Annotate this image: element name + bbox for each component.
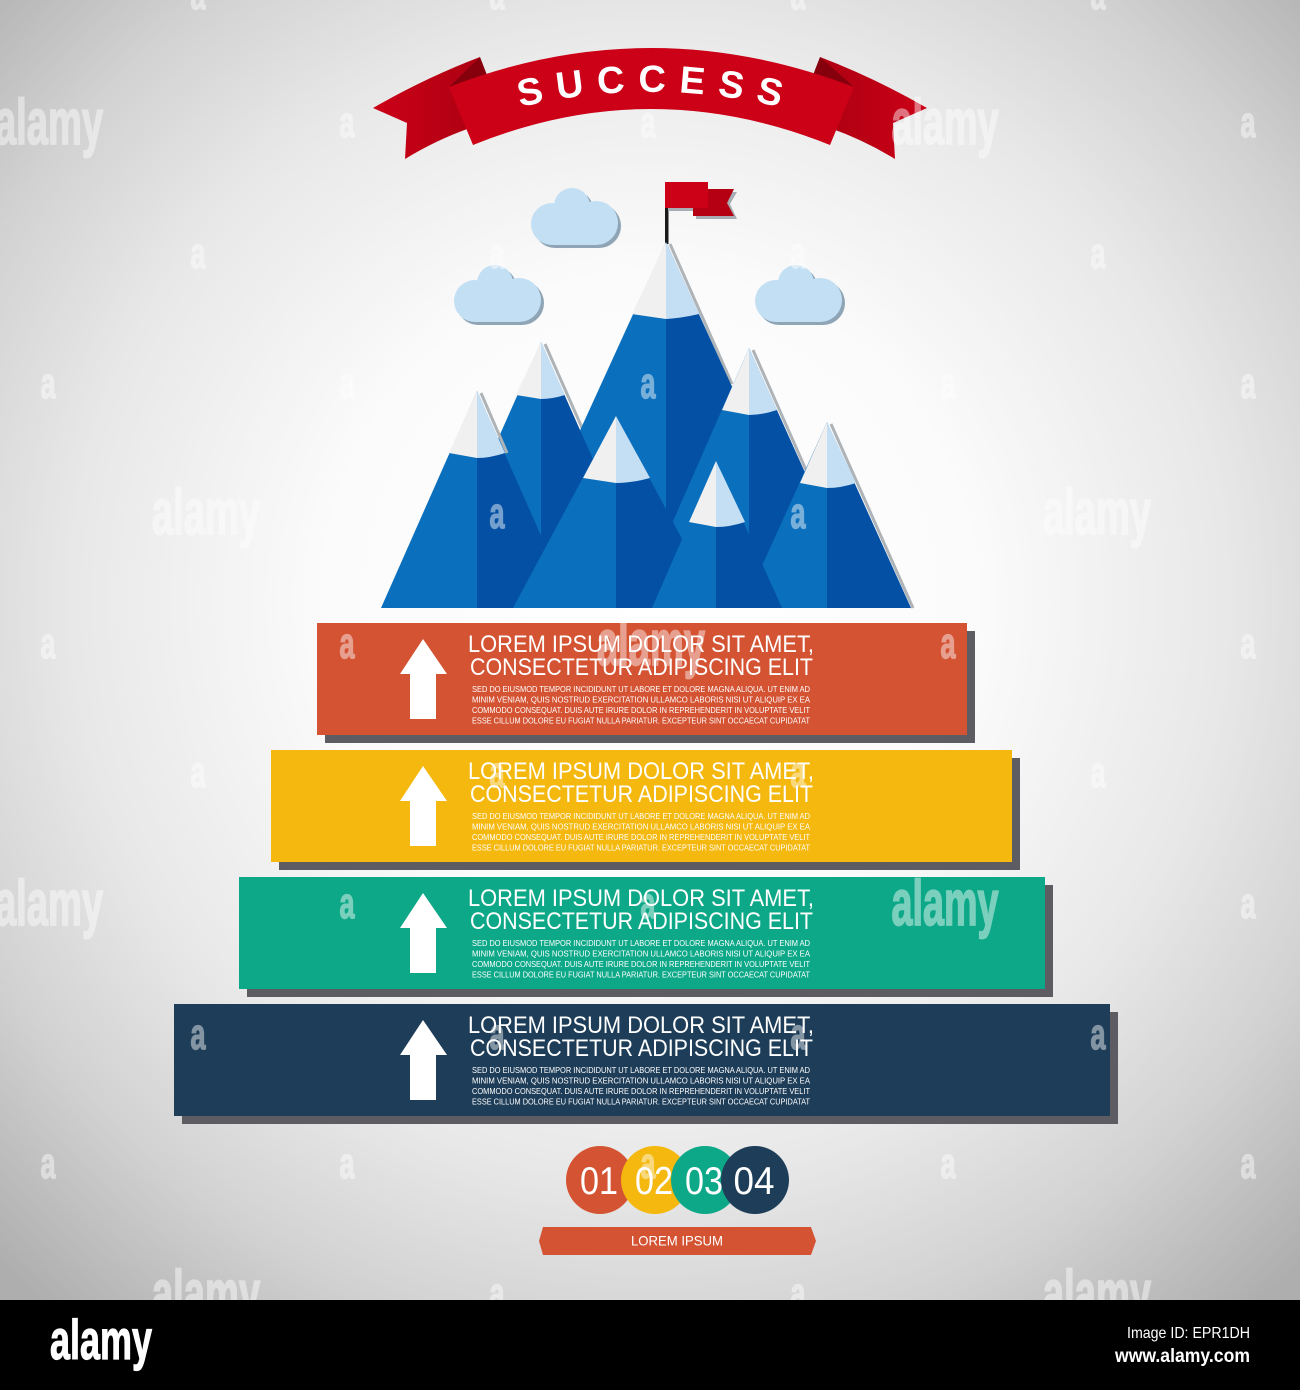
panel heading [468, 758, 814, 808]
label ribbon: lorem ipsum: LOREM IPSUM [631, 1232, 723, 1248]
watermarks: a [1240, 619, 1256, 668]
watermarks: alamy [1043, 476, 1151, 548]
icon: flag on the summit [665, 182, 737, 244]
watermarks: a [940, 359, 956, 408]
numbered circles 01-04: 01 [580, 1160, 618, 1203]
watermarks: alamy [0, 86, 103, 158]
panel heading: CONSECTETUR ADIPISCING ELIT [470, 654, 813, 681]
mountain: second from left [423, 342, 659, 608]
watermarks: a [640, 879, 656, 928]
mountain shadows [545, 244, 913, 608]
ribbon right tail [820, 57, 927, 159]
panel body text: SED DO EIUSMOD TEMPOR INCIDIDUNT UT LABORE ET DOLORE MAGNA ALIQUA. UT ENIM AD [472, 684, 810, 694]
panel body text [472, 1065, 810, 1106]
panel body text: ESSE CILLUM DOLORE EU FUGIAT NULLA PARIATUR. EXCEPTEUR SINT OCCAECAT CUPIDATAT [472, 842, 810, 852]
panel heading: CONSECTETUR ADIPISCING ELIT [470, 781, 813, 808]
panel: step 1 (bottom, navy) [174, 1004, 1118, 1124]
watermarks: a [40, 359, 56, 408]
panel: step 3 (yellow) [271, 750, 1020, 870]
watermarks: a [340, 98, 355, 147]
watermarks: a [40, 1139, 56, 1188]
banner: success ribbon [373, 48, 927, 159]
cloud: right [755, 265, 845, 325]
icon: up arrow [400, 639, 447, 719]
panel body text: COMMODO CONSEQUAT. DUIS AUTE IRURE DOLOR IN REPREHENDERIT IN VOLUPTATE VELIT [472, 705, 810, 715]
panel body text [472, 938, 810, 980]
panel body text: ESSE CILLUM DOLORE EU FUGIAT NULLA PARIATUR. EXCEPTEUR SINT OCCAECAT CUPIDATAT [472, 970, 810, 980]
icon: up arrow [400, 766, 447, 846]
watermarks: a [1240, 1139, 1256, 1188]
panel body text [472, 684, 810, 726]
panel body text [472, 811, 810, 852]
watermarks: alamy [892, 86, 999, 158]
watermarks: a [190, 748, 206, 797]
watermarks: alamy [152, 1257, 260, 1329]
panel heading: LOREM IPSUM DOLOR SIT AMET, [468, 885, 814, 912]
heading: success: SUCCESS [518, 65, 782, 106]
mountains [381, 242, 913, 608]
watermarks: a [1090, 229, 1106, 278]
watermarks: a [340, 359, 355, 408]
footer website: www.alamy.com [1114, 1346, 1250, 1367]
watermarks: alamy [597, 607, 705, 679]
watermarks: a [790, 229, 806, 278]
panel heading [468, 631, 814, 681]
watermarks: a [1240, 98, 1256, 147]
numbered circles 01-04: 03 [685, 1160, 723, 1203]
panel body text: MINIM VENIAM, QUIS NOSTRUD EXERCITATION ULLAMCO LABORIS NISI UT ALIQUIP EX EA [472, 1076, 810, 1086]
watermarks: alamy [1043, 1257, 1151, 1329]
mountain: front small [652, 461, 782, 608]
watermarks: a [490, 1269, 505, 1318]
watermarks: a [340, 879, 355, 928]
panel body text: COMMODO CONSEQUAT. DUIS AUTE IRURE DOLOR IN REPREHENDERIT IN VOLUPTATE VELIT [472, 959, 810, 969]
panel heading: LOREM IPSUM DOLOR SIT AMET, [468, 631, 814, 658]
watermarks: alamy [152, 476, 260, 548]
panel heading: LOREM IPSUM DOLOR SIT AMET, [468, 758, 814, 785]
watermarks: a [940, 1139, 956, 1188]
panel body text: MINIM VENIAM, QUIS NOSTRUD EXERCITATION ULLAMCO LABORIS NISI UT ALIQUIP EX EA [472, 694, 810, 704]
watermarks: a [490, 489, 505, 538]
footer bar [0, 1300, 1300, 1390]
ribbon right fold [813, 57, 854, 87]
cloud: top [531, 188, 621, 248]
panel heading: CONSECTETUR ADIPISCING ELIT [470, 908, 813, 935]
label ribbon: lorem ipsum [539, 1227, 816, 1255]
mountain: summit [499, 242, 833, 608]
footer image id: Image ID: EPR1DH [1127, 1325, 1250, 1342]
numbered circles 01-04 [566, 1146, 789, 1214]
panel body text: SED DO EIUSMOD TEMPOR INCIDIDUNT UT LABORE ET DOLORE MAGNA ALIQUA. UT ENIM AD [472, 1065, 810, 1075]
icon: up arrow [400, 1020, 447, 1100]
numbered circles 01-04: 04 [734, 1160, 774, 1203]
watermarks: a [490, 229, 505, 278]
mountain: right back [635, 348, 866, 608]
icon: up arrow [400, 893, 447, 973]
panel heading: CONSECTETUR ADIPISCING ELIT [470, 1035, 813, 1062]
watermarks: a [1090, 748, 1106, 797]
panel body text: COMMODO CONSEQUAT. DUIS AUTE IRURE DOLOR IN REPREHENDERIT IN VOLUPTATE VELIT [472, 1086, 810, 1096]
watermarks: a [790, 1010, 806, 1059]
footer logo: alamy [50, 1308, 152, 1371]
watermarks: a [190, 1010, 206, 1059]
cloud: left [454, 265, 544, 325]
panel body text: ESSE CILLUM DOLORE EU FUGIAT NULLA PARIATUR. EXCEPTEUR SINT OCCAECAT CUPIDATAT [472, 716, 810, 726]
watermarks: a [490, 748, 505, 797]
panel heading [468, 1012, 814, 1062]
ribbon main band [449, 48, 854, 145]
watermarks: alamy [0, 867, 103, 939]
panel body text: SED DO EIUSMOD TEMPOR INCIDIDUNT UT LABORE ET DOLORE MAGNA ALIQUA. UT ENIM AD [472, 811, 810, 821]
mountain: far right [743, 422, 911, 608]
watermarks: a [40, 619, 56, 668]
watermarks: a [790, 489, 806, 538]
watermarks: a [1240, 359, 1256, 408]
mountain: front centre [513, 416, 719, 608]
watermarks: a [640, 1139, 656, 1188]
panel body text: ESSE CILLUM DOLORE EU FUGIAT NULLA PARIATUR. EXCEPTEUR SINT OCCAECAT CUPIDATAT [472, 1096, 810, 1106]
watermarks: a [640, 359, 656, 408]
mountain: far left [381, 391, 573, 608]
panel: step 2 (green) [239, 877, 1053, 997]
watermarks: a [340, 1139, 355, 1188]
panel: step 4 (top, orange) [317, 623, 975, 743]
watermarks: a [1090, 1010, 1106, 1059]
panel body text: MINIM VENIAM, QUIS NOSTRUD EXERCITATION ULLAMCO LABORIS NISI UT ALIQUIP EX EA [472, 822, 810, 832]
watermarks: a [790, 1269, 806, 1318]
panel heading [468, 885, 814, 935]
watermarks: a [190, 229, 206, 278]
panel body text: MINIM VENIAM, QUIS NOSTRUD EXERCITATION ULLAMCO LABORIS NISI UT ALIQUIP EX EA [472, 948, 810, 958]
ribbon left fold [449, 57, 487, 87]
panel heading: LOREM IPSUM DOLOR SIT AMET, [468, 1012, 814, 1039]
panel body text: COMMODO CONSEQUAT. DUIS AUTE IRURE DOLOR IN REPREHENDERIT IN VOLUPTATE VELIT [472, 832, 810, 842]
watermarks: a [1240, 879, 1256, 928]
watermarks: a [790, 748, 806, 797]
watermarks: a [340, 619, 355, 668]
watermarks: a [640, 98, 656, 147]
ribbon left tail [373, 57, 480, 159]
panel body text: SED DO EIUSMOD TEMPOR INCIDIDUNT UT LABORE ET DOLORE MAGNA ALIQUA. UT ENIM AD [472, 938, 810, 948]
watermarks: a [940, 619, 956, 668]
watermarks: a [490, 1010, 505, 1059]
numbered circles 01-04: 02 [635, 1160, 673, 1203]
watermarks: alamy [892, 867, 999, 939]
